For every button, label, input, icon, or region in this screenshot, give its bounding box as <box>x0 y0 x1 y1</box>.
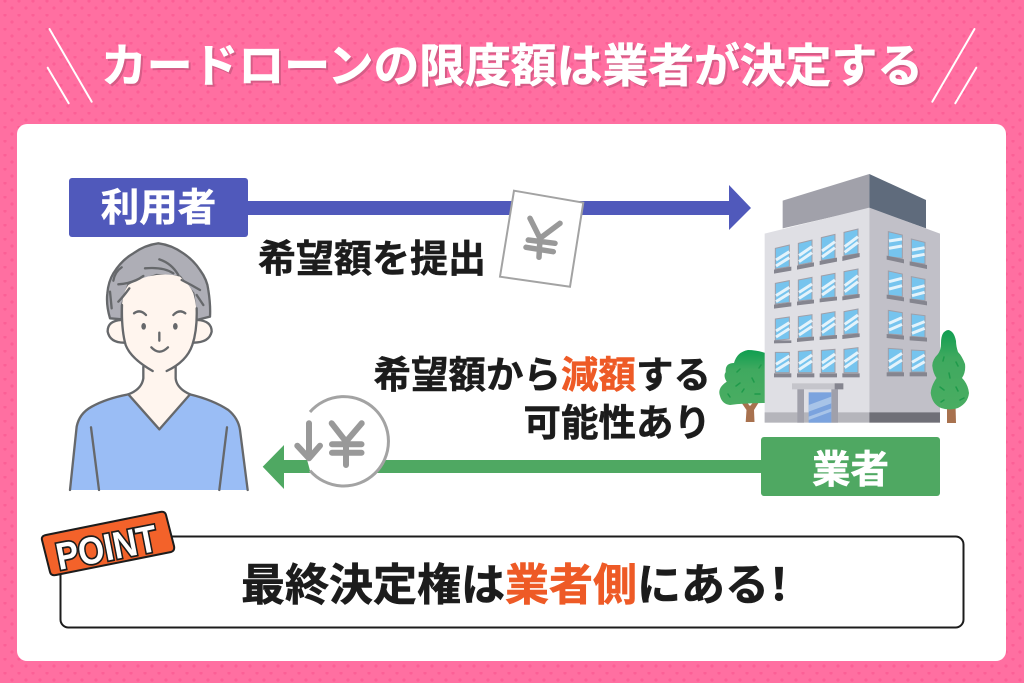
entrance <box>792 383 843 423</box>
roof block <box>783 174 869 228</box>
label: lender <box>761 437 940 496</box>
arrow: application from user to lender <box>248 185 751 230</box>
decorative title slashes left <box>48 29 92 103</box>
badge: POINT: POINT <box>53 518 161 579</box>
text: amount may be reduced: 希望額から減額する <box>374 354 711 396</box>
title: カードローンの限度額は業者が決定する <box>103 43 925 94</box>
icon: reduced yen circle <box>297 397 388 486</box>
window glints <box>776 237 925 370</box>
icon: yen document <box>500 191 583 287</box>
panel: conclusion box <box>60 536 964 628</box>
icon: tree right <box>931 330 969 423</box>
face <box>122 274 197 371</box>
label: user: 利用者 <box>101 187 216 230</box>
ears <box>108 320 212 343</box>
title: カードローンの限度額は業者が決定する <box>101 41 923 92</box>
arrow: result from lender to user <box>263 445 761 489</box>
illustration: user <box>70 243 248 490</box>
facial lines <box>70 259 248 490</box>
text: amount may be reduced <box>374 354 711 444</box>
neck <box>128 363 190 429</box>
decorative title slashes right <box>932 29 976 103</box>
eyes <box>141 323 178 330</box>
panel: main card <box>17 124 1006 661</box>
illustration: office building <box>765 174 940 423</box>
hair <box>107 243 210 320</box>
text: amount may be reduced: 可能性あり <box>524 402 711 444</box>
text: submit requested amount: 希望額を提出 <box>258 239 486 281</box>
text: conclusion: 最終決定権は業者側にある！ <box>241 561 801 610</box>
window sills <box>774 253 927 377</box>
shirt <box>70 394 248 490</box>
label: user <box>69 178 248 237</box>
label: lender: 業者 <box>812 449 889 492</box>
building facades <box>765 208 869 423</box>
front windows <box>775 229 925 373</box>
icon: tree left <box>719 350 768 422</box>
